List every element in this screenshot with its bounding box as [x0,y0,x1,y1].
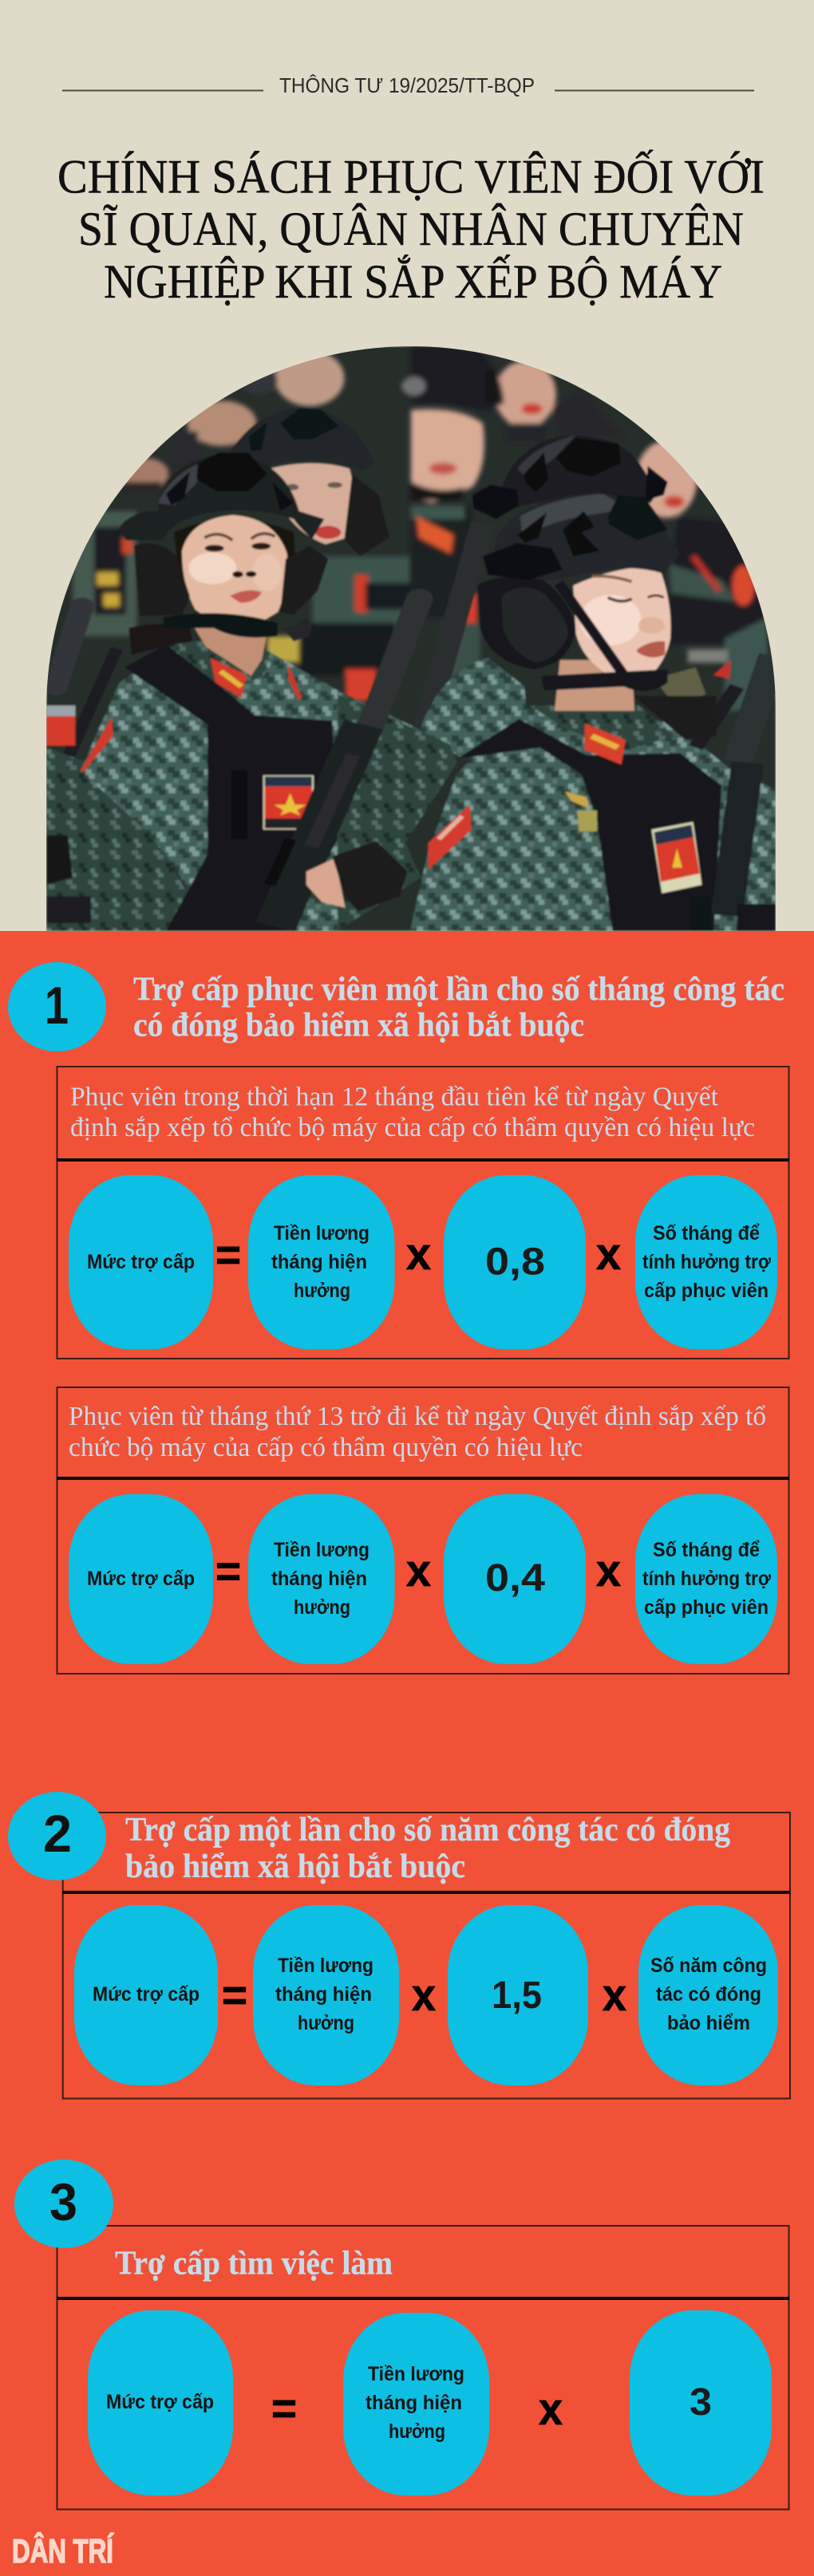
heading 2: Trợ cấp một lần cho số năm công tác có đóng [125,1812,730,1848]
blurred rear rank, right half [401,346,768,711]
condition text [70,1082,755,1142]
operator: times: x [596,1545,621,1596]
header label with rules: THÔNG TƯ 19/2025/TT-BQP [279,73,535,97]
panel: section 2 frame [62,1813,790,2098]
heading 3: Trợ cấp tìm việc làm [115,2245,393,2282]
formula pill: salary: hưởng [298,2012,354,2034]
section 2 [8,1792,790,2098]
condition text: chức bộ máy của cấp có thẩm quyền có hiệu lực [69,1433,583,1462]
formula pill: amount: Mức trợ cấp [93,1983,200,2006]
formula pill: coefficient 0,4: 0,4 [485,1557,545,1600]
formula pill: coefficient 0,4 [444,1494,586,1664]
title [57,150,765,308]
right soldier camo shoulder [421,658,530,759]
number badge 2: 2 [43,1804,72,1863]
formula pill: factor 3 [630,2310,772,2495]
panel: from month 13 [57,1387,789,1674]
formula pill: months [635,1494,777,1664]
formula pill: coefficient 0,8: 0,8 [485,1241,545,1283]
number badge 2 [8,1792,106,1880]
heading 1: Trợ cấp phục viên một lần cho số tháng công tác [133,972,784,1008]
formula pill: salary: tháng hiện [271,1251,367,1273]
formula pill: months: Số tháng để [653,1539,760,1561]
formula pill: salary: tháng hiện [275,1983,372,2006]
formula pill: salary [248,1494,394,1664]
operator: times: x [603,1970,626,2021]
formula pill: months: tính hưởng trợ [642,1568,771,1590]
left flag [263,775,314,830]
formula pill: years: bảo hiểm [667,2012,750,2034]
formula pill: years: tác có đóng [656,1983,761,2006]
formula pill: months: cấp phục viên [644,1596,769,1619]
heading 1 [133,972,784,1043]
number badge 1 [8,962,106,1051]
formula pill: months: cấp phục viên [644,1280,769,1302]
formula pill: salary [343,2313,489,2495]
left rifle [56,606,82,686]
formula pill: years [638,1905,778,2085]
title: SĨ QUAN, QUÂN NHÂN CHUYÊN [78,203,744,255]
section 1 [8,962,789,1674]
left soldier head [118,452,328,676]
heading 2: bảo hiểm xã hội bắt buộc [125,1848,465,1885]
right soldier body [410,704,776,931]
formula pill: coefficient 1,5 [448,1905,588,2085]
number badge 3: 3 [49,2172,77,2231]
heading 2 [125,1812,730,1885]
formula pill: months [635,1175,777,1350]
condition text [69,1402,766,1462]
operator: equals: = [215,1546,241,1596]
second soldier, left rank [230,408,389,556]
background: red section [0,931,814,2576]
formula pill: salary: Tiền lương [278,1955,373,1977]
panel: first 12 months [57,1067,789,1359]
condition text: định sắp xếp tổ chức bộ máy của cấp có thẩm quyền có hiệu lực [70,1113,755,1142]
number badge 3 [14,2160,113,2248]
operator: equals: = [271,2383,297,2433]
operator: times: x [406,1545,431,1596]
panel: section 3 frame [57,2226,789,2510]
formula pill: amount: Mức trợ cấp [87,1251,195,1273]
formula pill: salary: hưởng [389,2420,445,2443]
condition text: Phục viên trong thời hạn 12 tháng đầu tiên kể từ ngày Quyết [70,1082,719,1112]
formula pill: salary: Tiền lương [368,2363,464,2385]
left soldier rifle [371,598,420,724]
formula pill: salary: tháng hiện [366,2392,462,2414]
formula pill: salary [248,1175,394,1350]
rifle behind [441,522,485,683]
formula pill: factor 3: 3 [690,2381,712,2424]
formula pill: amount [74,1905,218,2085]
background: beige header [0,0,814,932]
formula pill: years: Số năm công [650,1955,767,1977]
hand [306,858,346,908]
formula pill: months: tính hưởng trợ [642,1251,771,1273]
formula pill: amount [69,1494,213,1664]
formula pill: coefficient 1,5: 1,5 [492,1974,542,2017]
photo: soldiers in arch frame [46,346,776,931]
formula pill: amount: Mức trợ cấp [106,2391,214,2413]
formula pill: months: Số tháng để [653,1222,760,1245]
formula pill: coefficient 0,8 [444,1175,586,1350]
operator: times: x [539,2384,563,2435]
formula pill: salary: hưởng [294,1596,350,1619]
heading 1: có đóng bảo hiểm xã hội bắt buộc [133,1007,584,1043]
formula pill: amount [88,2310,233,2495]
formula pill: salary [253,1905,399,2085]
logo: Dân Trí: DÂN TRÍ [12,2531,114,2570]
title: NGHIỆP KHI SẮP XẾP BỘ MÁY [104,255,722,308]
number badge 1: 1 [45,976,69,1035]
operator: equals: = [215,1229,241,1280]
formula pill: salary: Tiền lương [274,1539,369,1561]
condition text: Phục viên từ tháng thứ 13 trở đi kể từ ngày Quyết định sắp xếp tổ [69,1402,766,1431]
formula pill: salary: Tiền lương [274,1222,369,1245]
formula pill: amount [69,1175,213,1350]
section 3 [14,2160,789,2510]
formula pill: amount: Mức trợ cấp [87,1568,195,1590]
title: CHÍNH SÁCH PHỤC VIÊN ĐỐI VỚI [57,150,765,203]
formula pill: salary: tháng hiện [271,1568,367,1590]
operator: equals: = [222,1970,247,2020]
left soldier body [46,748,188,931]
operator: times: x [596,1229,621,1280]
right soldier head [472,436,680,711]
operator: times: x [412,1970,436,2021]
formula pill: salary: hưởng [294,1280,350,1302]
blurred rear rank, left half [73,350,411,701]
operator: times: x [406,1229,431,1280]
